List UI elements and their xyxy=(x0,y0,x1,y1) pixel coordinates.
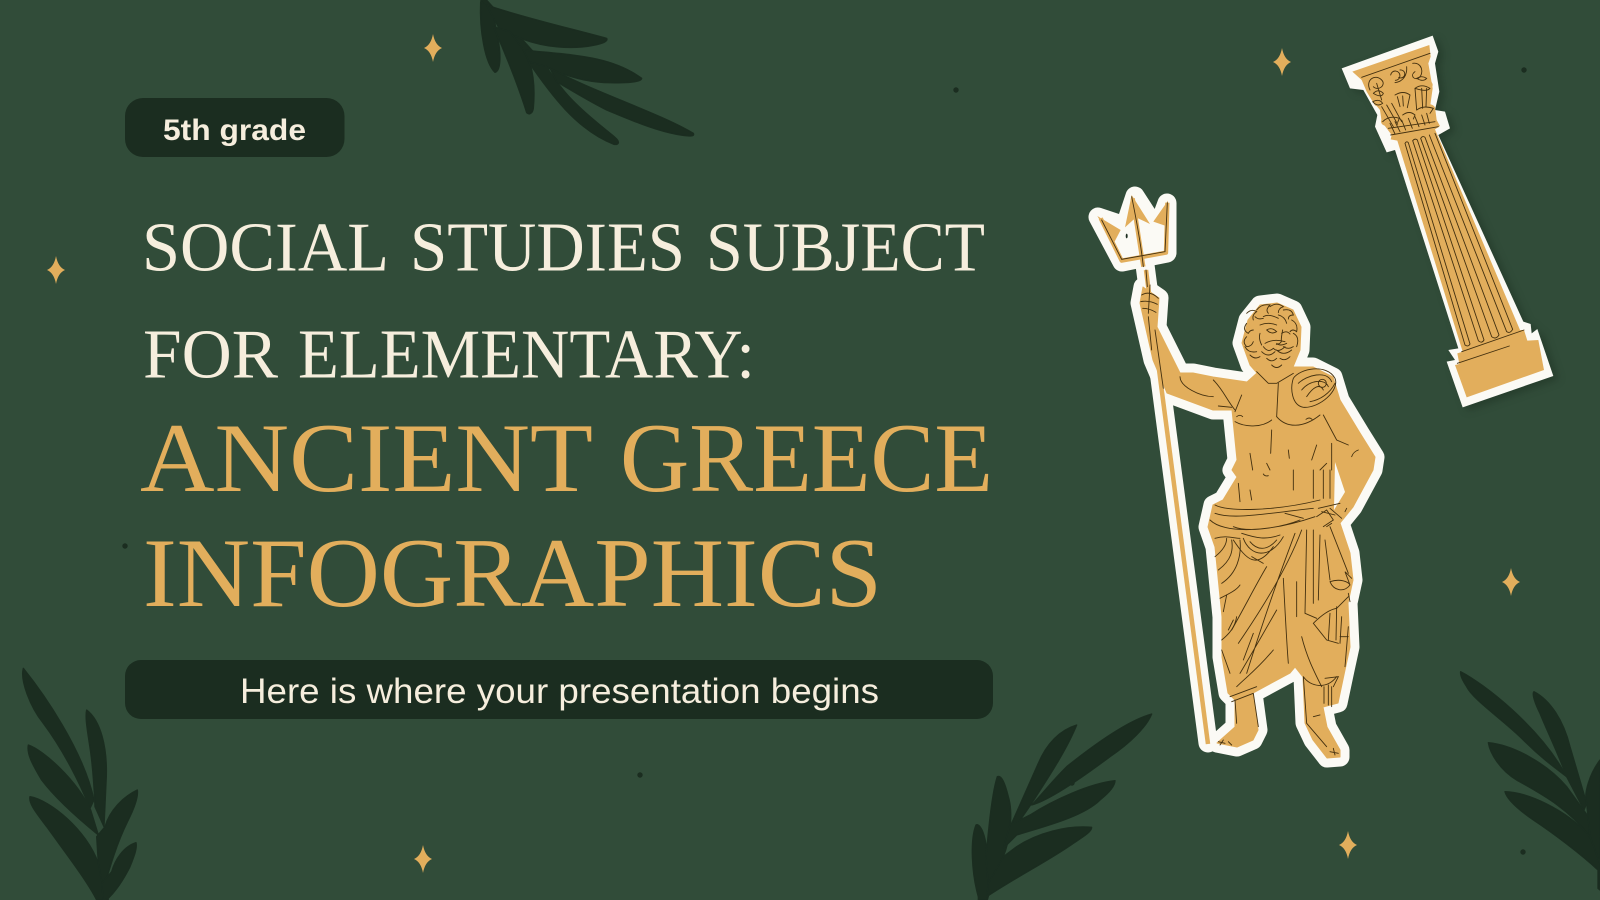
illustration: column xyxy=(1342,36,1553,407)
dot decorations xyxy=(122,67,1527,855)
title: SUBJECT xyxy=(706,210,985,286)
leaf: bottom left xyxy=(23,668,138,900)
grade badge xyxy=(125,98,344,157)
column capital volutes xyxy=(1365,76,1435,126)
column sticker outline xyxy=(1342,36,1553,407)
title: ELEMENTARY: xyxy=(298,316,755,394)
title: INFOGRAPHICS xyxy=(143,519,882,628)
leaf: bottom centre xyxy=(972,714,1152,900)
column gold body xyxy=(1352,45,1544,397)
statue sticker outline xyxy=(1098,196,1375,758)
title: STUDIES xyxy=(410,210,685,286)
title: GREECE xyxy=(620,404,993,513)
leaf: bottom right xyxy=(1461,672,1600,890)
title: ANCIENT xyxy=(140,404,593,513)
grade badge: 5th grade xyxy=(163,114,306,147)
leaf: top centre xyxy=(479,0,694,144)
statue drapery line art xyxy=(1210,470,1352,755)
subtitle bar: Here is where your presentation begins xyxy=(240,672,879,711)
column line details xyxy=(1362,53,1524,363)
title: FOR xyxy=(143,316,278,394)
title: SOCIAL xyxy=(142,210,389,286)
trident gold xyxy=(1097,195,1168,267)
white gap inside arm xyxy=(1334,462,1345,510)
illustration: Poseidon statue xyxy=(1097,195,1375,758)
statue upper body line art xyxy=(1102,197,1358,470)
subtitle bar xyxy=(125,660,993,719)
statue gold figure xyxy=(1140,270,1375,758)
title xyxy=(140,210,993,628)
